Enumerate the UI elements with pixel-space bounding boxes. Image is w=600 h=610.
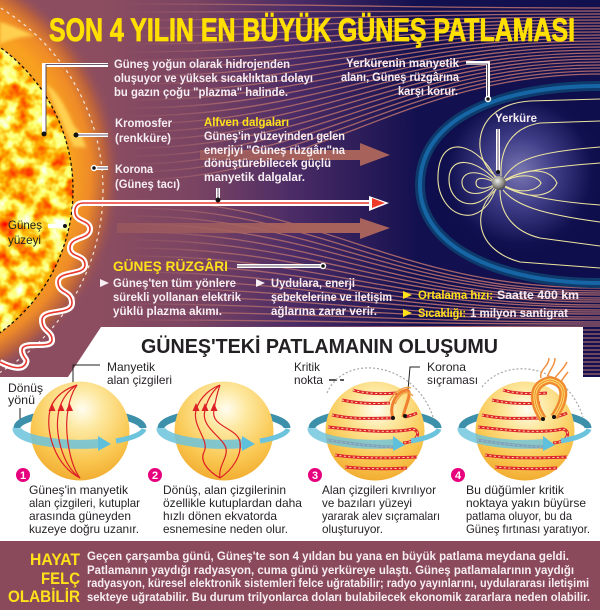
badge 2 — [148, 468, 162, 482]
caption 3: oluşturuyor. — [322, 522, 383, 536]
heading: formation: GÜNEŞ'TEKİ PATLAMANIN OLUŞUMU — [141, 335, 498, 358]
label: chromosphere: Kromosfer — [115, 116, 172, 130]
stat: temperature: 1 milyon santigrat — [470, 306, 568, 320]
caption 2 — [163, 483, 302, 536]
heading: life may be paralysed — [8, 550, 81, 606]
heading: solar wind: GÜNEŞ RÜZGÂRI — [113, 257, 228, 274]
badge 3 — [308, 468, 322, 482]
text: solar wind damage: şebekelerine ve iletişim — [271, 290, 392, 304]
text: plasma note: Güneş yoğun olarak hidrojenden — [114, 57, 290, 71]
label: earth: Yerküre — [495, 111, 537, 125]
text: bottom paragraph: Geçen çarşamba günü, Güneş'te son 4 yıldan bu yana en büyük patlama meydana geldi. — [87, 549, 569, 563]
sun surface — [0, 14, 73, 366]
label: magnetic field lines — [73, 360, 172, 387]
label: rotation direction: yönü — [8, 393, 35, 407]
sun corona glow — [0, 0, 122, 400]
text: solar wind damage: Uydulara, enerji — [271, 276, 355, 290]
label: critical point: nokta — [294, 373, 323, 387]
panel: formation of the solar flare — [0, 327, 600, 541]
solar wind wavy arrow — [0, 196, 389, 368]
text: Alfven waves: manyetik dalgalar. — [204, 170, 305, 184]
connector lines — [42, 63, 500, 268]
panel: bottom band — [0, 541, 600, 610]
caption 2: esnemesine neden olur. — [163, 522, 288, 536]
text: Alfven waves — [204, 115, 345, 184]
flare loop and rays — [535, 358, 568, 419]
text: solar wind definition: yüklü plazma akımı. — [113, 304, 222, 318]
arrowhead — [369, 196, 389, 211]
stat: temperature — [403, 306, 568, 320]
text: Alfven waves: enerjiyi "Güneş rüzgârı"na — [204, 143, 345, 157]
heading: life may be paralysed: HAYAT — [30, 550, 81, 569]
heading: life may be paralysed: OLABİLİR — [8, 587, 80, 606]
text: bottom paragraph: Patlamanın yaydığı radyasyon, cuma günü yerküreye ulaştı. Güneş patlamalarının yaydığı — [87, 563, 574, 577]
text: solar wind damage: ağlarına zarar verir. — [271, 304, 377, 318]
text: Alfven waves: Güneş'in yüzeyinden gelen — [204, 129, 345, 143]
teal outer glow — [420, 86, 600, 283]
caption 2: hızlı dönen ekvatorda — [163, 509, 277, 523]
sphere 1 — [17, 382, 144, 480]
text: plasma note: bu gazın çoğu "plazma" halinde. — [114, 85, 288, 99]
arrow: brown lower wave — [117, 218, 390, 239]
label: sun surface: yüzeyi — [8, 233, 41, 247]
caption 1 — [29, 483, 140, 536]
text: bottom paragraph — [87, 549, 590, 604]
label: chromosphere: (renkküre) — [115, 131, 171, 145]
background panel — [0, 0, 600, 377]
sphere 4 — [462, 358, 589, 480]
surface granulation — [0, 47, 73, 332]
label: corona: (Güneş tacı) — [115, 177, 180, 191]
caption 1: alan çizgileri, kutuplar — [29, 496, 140, 510]
text: earth's magnetic field — [341, 56, 459, 98]
text: solar wind definition — [100, 276, 241, 318]
badge 2: 2 — [152, 470, 158, 482]
stat: temperature: Sıcaklığı: — [418, 306, 466, 320]
arrow: brown upper wave — [200, 143, 390, 166]
caption 1: arasında güneyden — [29, 509, 131, 523]
text: earth's magnetic field: karşı korur. — [398, 84, 458, 98]
caption 4: Güneş fırtınası yaratıyor. — [466, 522, 590, 536]
label: magnetic field lines: Manyetik — [107, 360, 156, 374]
sphere 3 — [312, 368, 439, 480]
chromosphere dashed outline — [0, 14, 73, 366]
text: earth's magnetic field: alanı, Güneş rüzgârına — [341, 70, 459, 84]
label: critical point: Kritik — [294, 360, 321, 374]
prominences — [0, 22, 86, 148]
earth glow — [426, 92, 600, 277]
label: corona eruption: sıçraması — [427, 373, 478, 387]
stat: average speed: Ortalama hızı: — [418, 288, 493, 302]
caption 1: kuzeye doğru uzanır. — [29, 522, 139, 536]
caption 3: Alan çizgileri kıvrılıyor — [322, 483, 436, 497]
text: Alfven waves: dönüştürebilecek güçlü — [204, 156, 331, 170]
label: corona — [115, 162, 180, 191]
caption 4: patlama oluyor, bu da — [466, 509, 572, 523]
caption 3 — [322, 483, 440, 536]
label: chromosphere — [115, 116, 172, 145]
label: critical point — [294, 360, 344, 387]
caption 2: özellikle kutuplardan daha — [163, 496, 302, 510]
earth — [492, 176, 506, 190]
stat: average speed: Saatte 400 km — [497, 288, 579, 302]
caption 3: yararak alev sıçramaları — [322, 509, 440, 523]
magnetic field lines — [438, 99, 600, 268]
badge 1: 1 — [20, 470, 26, 482]
label: sun surface: Güneş — [8, 218, 42, 232]
text: solar wind damage — [256, 276, 392, 318]
heading: life may be paralysed: FELÇ — [41, 569, 80, 588]
sun — [0, 0, 116, 373]
label: magnetic field lines: alan çizgileri — [107, 373, 172, 387]
caption 4 — [466, 483, 590, 536]
label: corona eruption — [408, 360, 478, 390]
badge 4 — [451, 468, 465, 482]
badge 1 — [16, 468, 30, 482]
label: rotation direction: Dönüş — [8, 381, 43, 395]
text: plasma note: oluşuyor ve yüksek sıcaklıktan dolayı — [114, 71, 313, 85]
text: solar wind definition: sürekli yollanan elektrik — [113, 290, 241, 304]
solar wind field lines — [130, 4, 600, 374]
caption 2: Dönüş, alan çizgilerinin — [163, 483, 286, 497]
text: earth's magnetic field: Yerkürenin manyetik — [346, 56, 459, 70]
wavy arrow tail over panel edge — [0, 340, 52, 368]
stat: average speed — [403, 288, 579, 302]
sphere 2 — [161, 382, 288, 480]
badge 3: 3 — [312, 470, 318, 482]
label: rotation direction — [8, 381, 43, 422]
corona eruption loop — [389, 388, 413, 418]
label: corona: Korona — [115, 162, 153, 176]
text: solar wind definition: Güneş'ten tüm yönlere — [113, 276, 236, 290]
label: sun surface — [8, 218, 42, 247]
caption 1: Güneş'in manyetik — [29, 483, 129, 497]
blue boundary — [420, 86, 600, 283]
corona dashed outline — [0, 0, 103, 403]
label: corona eruption: Korona — [427, 360, 466, 374]
badge 4: 4 — [455, 470, 462, 482]
text: Alfven waves: Alfven dalgaları — [204, 115, 289, 129]
text: plasma note — [114, 57, 313, 99]
caption 4: Bu düğümler kritik — [466, 483, 565, 497]
magnetosphere — [420, 86, 600, 283]
caption 4: noktaya yakın büyürse — [466, 496, 586, 510]
caption 3: ve bazıları yüzeyi — [322, 496, 412, 510]
